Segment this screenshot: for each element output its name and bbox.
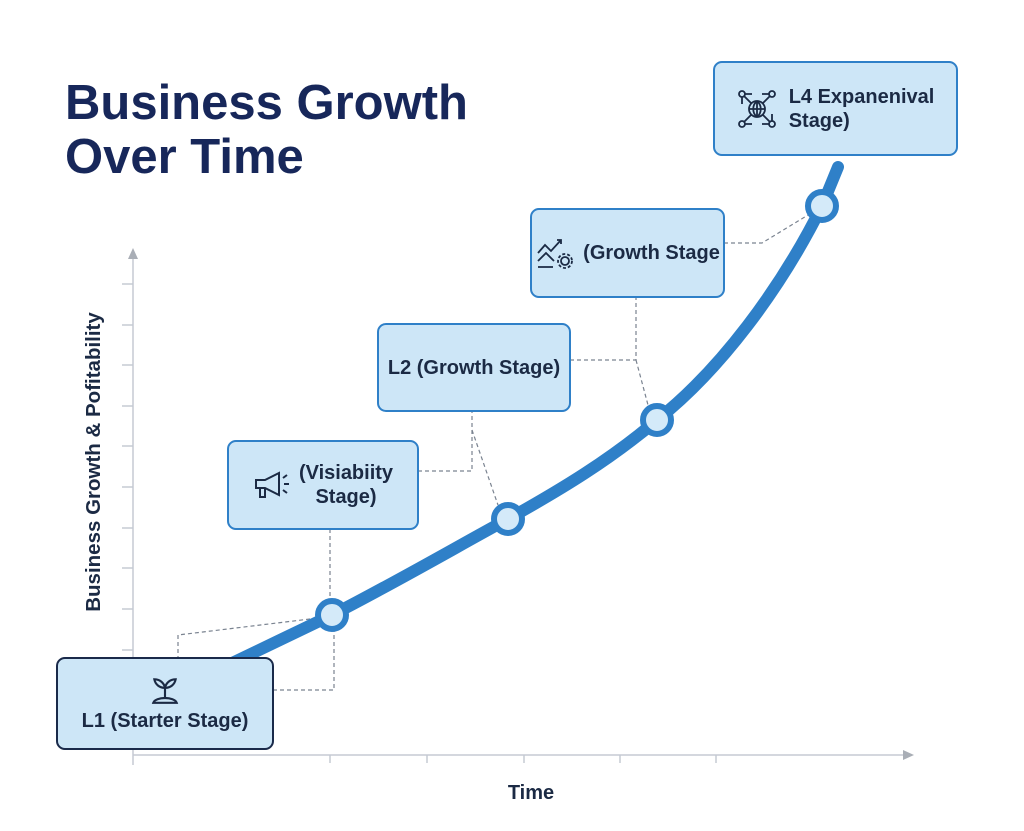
box: L1 starter <box>56 657 274 750</box>
y axis <box>122 258 905 765</box>
box: L4 expansion <box>713 61 958 156</box>
box: L1 starter: L1 (Starter Stage) <box>82 710 248 732</box>
box: L2: L2 (Growth Stage) <box>388 356 560 378</box>
x axis label: Time <box>508 782 554 804</box>
icon: globe network <box>738 90 776 128</box>
box: visibility <box>227 440 419 530</box>
box: growth <box>530 208 725 298</box>
growth curve <box>230 167 838 664</box>
nodes <box>318 192 836 629</box>
icon: sprout <box>152 678 178 704</box>
title: Business Growth <box>65 76 468 130</box>
dashed connectors <box>178 215 808 690</box>
title: Over Time <box>65 130 304 184</box>
box: visibility: (Visiabiity <box>299 462 393 484</box>
box: visibility: Stage) <box>315 486 377 508</box>
box: growth: (Growth Stage <box>583 242 720 264</box>
box: L4 expansion: Stage) <box>789 110 850 132</box>
box: L4 expansion: L4 Expanenival <box>789 86 934 108</box>
icon: megaphone <box>255 471 289 498</box>
title <box>65 76 468 184</box>
y axis label: Business Growth & Pofitability <box>82 312 105 612</box>
box: L2 <box>377 323 571 412</box>
icon: chart gear <box>537 239 573 269</box>
